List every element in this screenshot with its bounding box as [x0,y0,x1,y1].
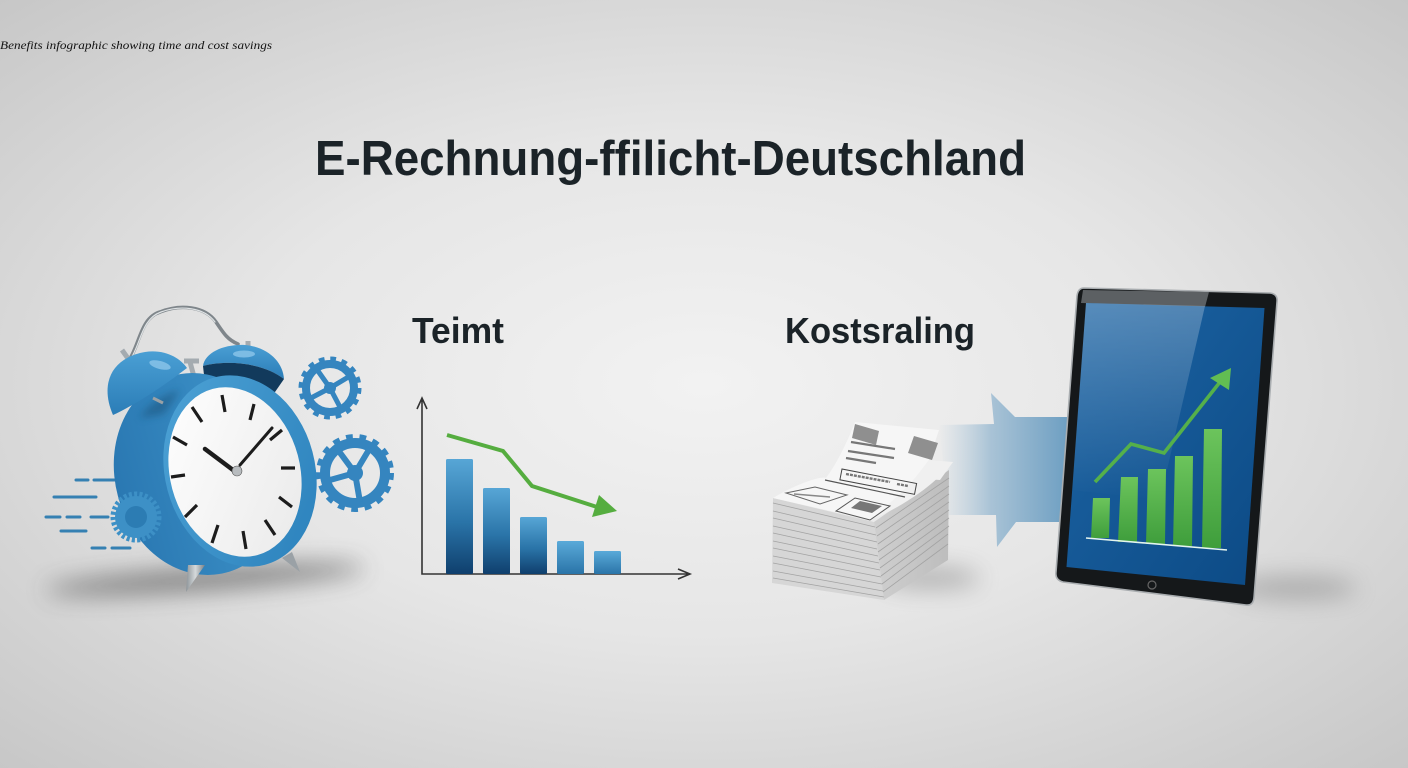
axes [417,398,690,579]
tablet shadow [1233,577,1357,599]
icon: tablet with rising chart [1056,288,1357,605]
right face [874,470,949,600]
tablet screen [1066,303,1264,585]
tablet frame [1056,288,1277,605]
right foot [282,552,300,572]
bars [446,459,621,574]
clock face [150,372,320,572]
front face [772,498,884,600]
lower gear [320,438,390,508]
shadow below left bell [140,390,180,418]
screen glare [1072,303,1205,500]
heading: time: Teimt [412,310,504,351]
clock body [91,353,309,595]
clock shadow [45,557,365,601]
upper gear [302,360,358,416]
lower sheet corner [912,462,953,480]
page edges [773,478,949,597]
rising arrow [1095,368,1231,482]
caption text: Benefits infographic showing time and cost savings [0,38,272,52]
clock hands [205,449,233,470]
heading: cost: Kostsraling [785,310,975,351]
speed lines [46,480,151,548]
top bezel glare [1081,290,1209,307]
green falling arrow [447,435,617,517]
striker posts [122,341,248,384]
chart: falling time [417,398,690,579]
invoice details [786,424,938,520]
pale blue arrow [939,393,1068,547]
left bell [108,351,187,415]
bell handle [128,307,238,362]
icon: paper stack [772,422,980,600]
clock rim [142,358,338,584]
hour ticks [171,395,295,549]
invoice page [773,422,939,520]
icon: alarm clock with gears [45,307,390,601]
green bars [1091,429,1222,548]
baseline [1086,538,1227,550]
right bell [203,345,284,392]
left foot [186,565,205,592]
home button [1148,581,1156,589]
stack shadow [880,568,980,588]
title: E-Rechnung-ffilicht-Deutschland [315,132,1026,186]
small gear [114,494,158,540]
